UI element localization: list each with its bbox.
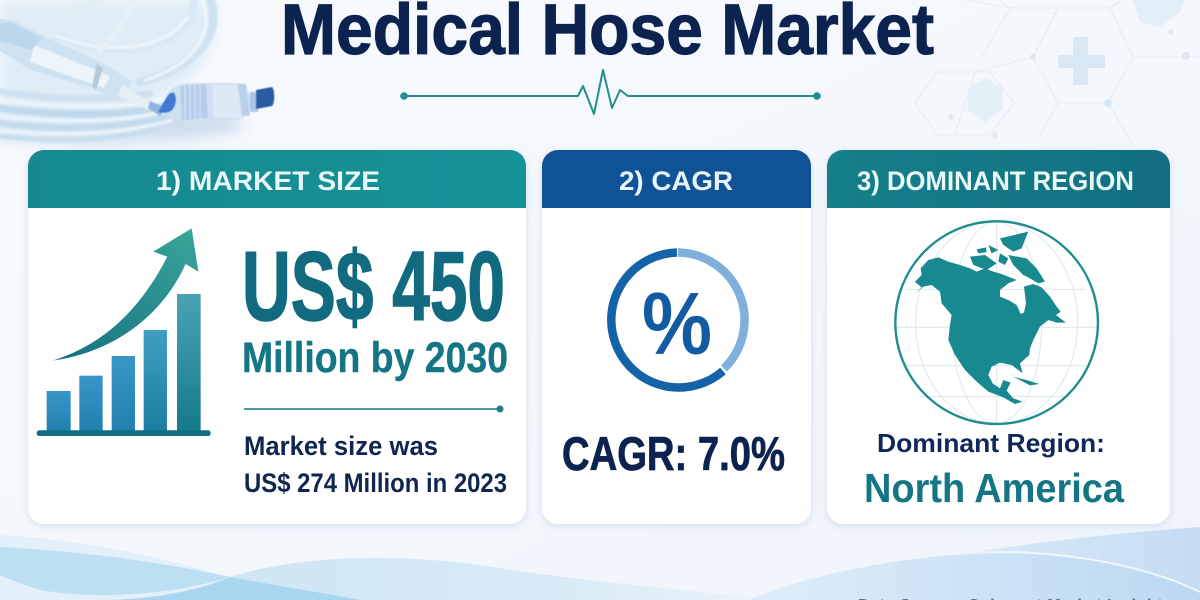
panel header: CAGR	[542, 150, 811, 208]
background waves	[0, 527, 1200, 600]
market size note: Market size was	[244, 431, 438, 461]
donut gauge with percent: %	[642, 274, 712, 373]
panel header: dominant region	[827, 150, 1170, 208]
market size note: US$ 274 Million in 2023	[244, 468, 507, 498]
globe map of North America	[895, 221, 1098, 424]
donut gauge with percent	[611, 252, 745, 387]
big value: US$ 450	[242, 231, 505, 341]
market size note	[244, 431, 507, 498]
icon: medical cross	[1058, 37, 1105, 85]
region value: North America	[864, 465, 1125, 511]
heartbeat divider	[400, 70, 821, 114]
divider with dot	[244, 406, 504, 412]
panel header: market size: 1) MARKET SIZE	[156, 166, 380, 196]
CAGR value: CAGR: 7.0%	[562, 427, 785, 480]
hose photo illustration	[0, 0, 274, 142]
panel: market size	[28, 150, 526, 524]
panel header: CAGR: 2) CAGR	[619, 166, 733, 196]
background hexagon pattern with medical cross	[915, 0, 1200, 145]
value subtitle: Million by 2030	[242, 334, 508, 382]
bar chart with growth arrow	[37, 228, 211, 436]
panel header: market size	[28, 150, 526, 208]
panel header: dominant region: 3) DOMINANT REGION	[857, 166, 1134, 196]
region label: Dominant Region:	[877, 428, 1105, 458]
panel: dominant region	[827, 150, 1170, 524]
panel: CAGR	[542, 150, 811, 524]
